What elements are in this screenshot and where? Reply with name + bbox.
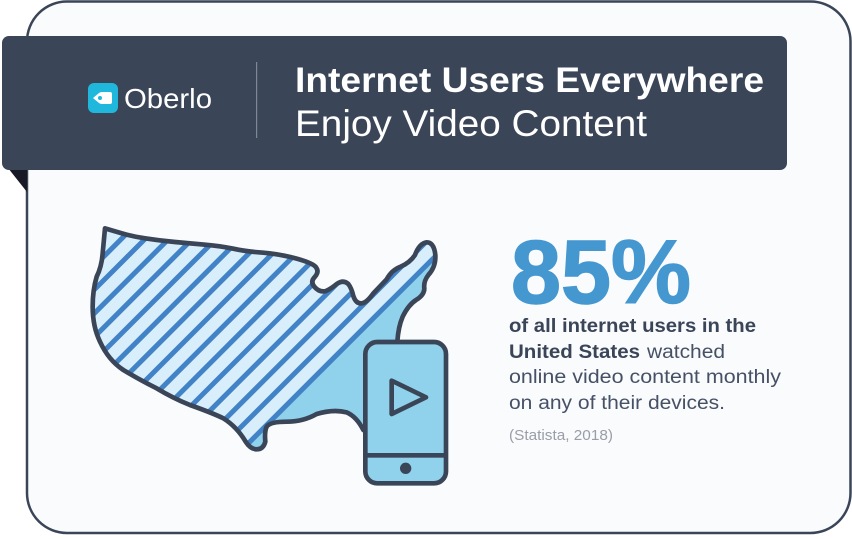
statistic description [509,316,782,414]
logo: Oberlo [88,83,212,114]
icon: smartphone with play button [365,342,446,483]
map of the United States, hatched [90,226,438,452]
statistic description: of all internet users in the [509,316,756,337]
illustration: US map with phone [90,226,448,486]
big statistic: 85% [511,223,691,323]
title: Enjoy Video Content [295,103,648,144]
statistic description: online video content monthly [509,367,782,388]
ribbon fold [8,168,27,192]
statistic description: on any of their devices. [509,393,725,414]
header banner [2,36,787,170]
icon: price tag [88,83,118,113]
statistic description: watched [646,342,725,363]
title: Internet Users Everywhere [295,61,764,100]
logo wordmark: Oberlo [124,83,212,114]
title [295,61,764,144]
header divider [256,62,257,138]
statistic description: United States [509,342,640,363]
source note: (Statista, 2018) [509,427,613,444]
